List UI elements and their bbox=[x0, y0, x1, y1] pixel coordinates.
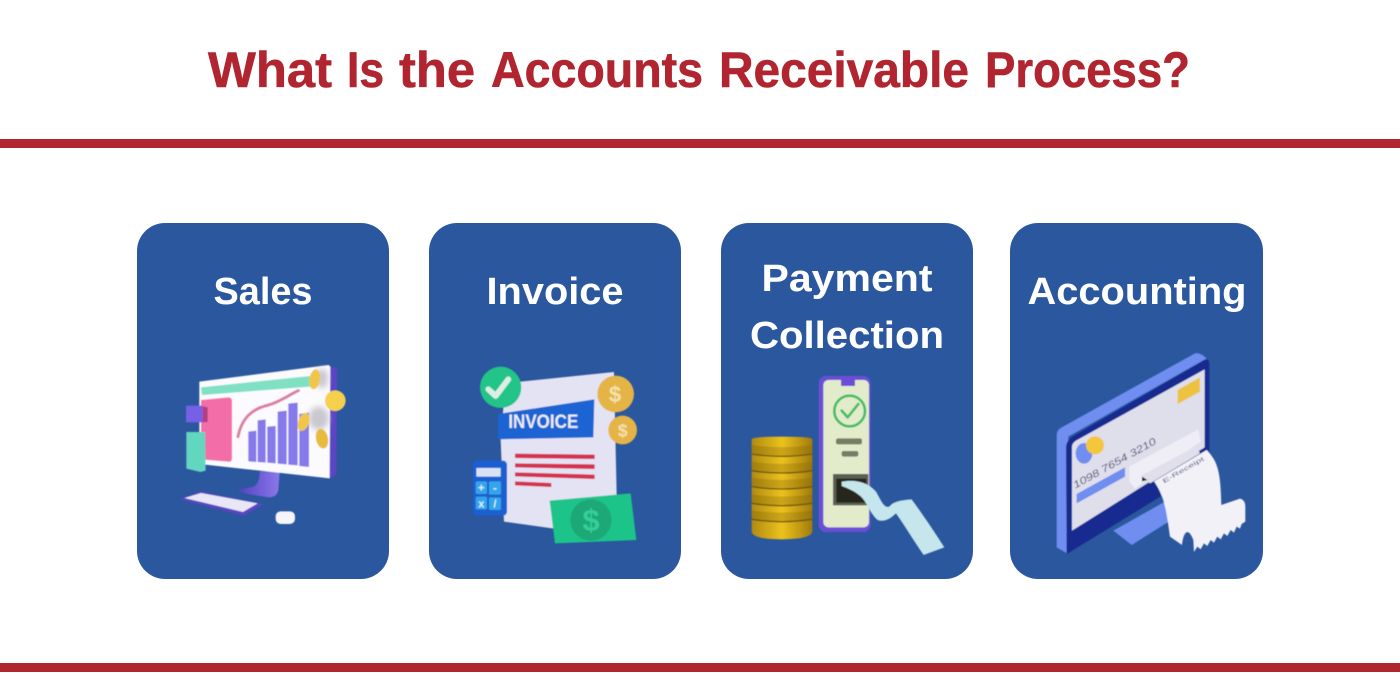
heading: invoice: Invoice bbox=[486, 271, 624, 313]
icon: computer with bar chart bbox=[180, 365, 346, 524]
icon: invoice document: + bbox=[478, 482, 485, 494]
icon: invoice document: x bbox=[478, 498, 484, 510]
heading: payment collection: Collection bbox=[750, 315, 944, 357]
title: the bbox=[399, 42, 475, 98]
panel: sales bbox=[137, 223, 389, 579]
icon: card monitor with e-receipt bbox=[1057, 353, 1245, 554]
icon: invoice document: $ bbox=[582, 504, 600, 538]
panel: accounting bbox=[1010, 223, 1263, 579]
icon: invoice document: / bbox=[494, 498, 497, 510]
heading: payment collection bbox=[750, 258, 944, 357]
icon: card monitor with e-receipt: 1098 7654 3210 bbox=[1071, 436, 1159, 491]
heading: payment collection: Payment bbox=[762, 258, 933, 300]
icon: invoice document bbox=[473, 367, 637, 543]
title: What bbox=[208, 42, 332, 98]
title: Is bbox=[347, 42, 384, 98]
icon: invoice document: - bbox=[493, 482, 497, 494]
title: Receivable bbox=[719, 42, 969, 98]
icon: phone with coins and receipt bbox=[752, 376, 944, 555]
icon: invoice document: $ bbox=[618, 420, 628, 440]
panel: payment collection bbox=[721, 223, 973, 579]
icon: invoice document: $ bbox=[609, 382, 621, 407]
title bbox=[208, 42, 1190, 98]
top rule bbox=[0, 139, 1400, 148]
icon: card monitor with e-receipt: E-Receipt bbox=[1162, 456, 1206, 485]
icon: invoice document: INVOICE bbox=[508, 412, 578, 433]
bottom rule bbox=[0, 663, 1400, 672]
heading: sales: Sales bbox=[214, 271, 312, 313]
title: Process? bbox=[985, 42, 1190, 98]
title: Accounts bbox=[491, 42, 703, 98]
panel: invoice bbox=[429, 223, 681, 579]
heading: accounting: Accounting bbox=[1028, 271, 1246, 313]
